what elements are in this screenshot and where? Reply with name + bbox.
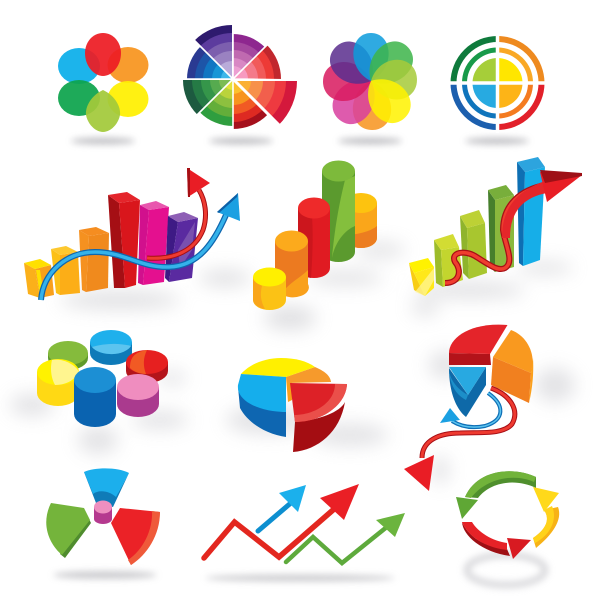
icon: eight petal flower bbox=[322, 33, 421, 132]
slice: red bbox=[449, 325, 508, 365]
cylinder: amber back bbox=[345, 193, 377, 248]
cylinder: orange bbox=[275, 230, 309, 297]
blade: blue bbox=[84, 468, 129, 507]
arrow: red bbox=[462, 522, 531, 559]
chart: 3D pie bbox=[238, 358, 347, 452]
row three ground shadows bbox=[10, 351, 575, 484]
shadow ring bbox=[467, 555, 545, 585]
arrow: red bbox=[147, 168, 210, 258]
chart: cylinders bbox=[253, 160, 377, 310]
slice: blue wedge bbox=[449, 367, 486, 417]
disc: light blue bbox=[90, 330, 132, 365]
icon: disc cluster bbox=[37, 330, 168, 427]
disc: green bbox=[48, 341, 88, 370]
bar: blue bbox=[517, 157, 545, 266]
bar three bbox=[79, 227, 109, 292]
slice: orange bbox=[491, 330, 533, 403]
cylinder: yellow bbox=[253, 268, 286, 310]
bar: yellow bbox=[409, 258, 434, 296]
icon: six petal flower bbox=[58, 33, 148, 132]
bar four bbox=[108, 192, 140, 288]
blade: red bbox=[111, 508, 160, 565]
icon: cycle arrows bbox=[456, 471, 559, 585]
cylinder: blue bbox=[74, 367, 116, 427]
row one ground shadows bbox=[71, 138, 529, 144]
wedge: dark green bbox=[183, 80, 231, 114]
bar: green bbox=[488, 185, 514, 272]
arrow: blue swoop bbox=[440, 393, 500, 427]
bottom ground shadows bbox=[53, 571, 395, 582]
bar six bbox=[165, 212, 198, 282]
arrow: green bbox=[286, 513, 405, 563]
hub cylinder bbox=[94, 500, 112, 524]
chart: bars with two arrows bbox=[24, 168, 240, 300]
cylinder: yellow bbox=[37, 359, 79, 406]
icon: three blade fan bbox=[46, 468, 160, 565]
bar five bbox=[138, 201, 169, 285]
arrow: yellow bbox=[533, 487, 559, 548]
chart: exploded pie with arrows bbox=[404, 325, 533, 491]
arrow: red bbox=[204, 484, 359, 558]
arrow: green bbox=[456, 471, 536, 519]
arrow: blue bbox=[41, 193, 240, 300]
icon: color wheel bbox=[183, 25, 297, 129]
cylinder: green bbox=[322, 160, 355, 262]
bar one bbox=[24, 259, 54, 298]
bar: lime bbox=[460, 210, 487, 279]
slice: orange bbox=[286, 367, 331, 402]
slice: red bbox=[290, 383, 347, 452]
wedge: red pink bbox=[235, 46, 281, 79]
slice: yellow bbox=[241, 358, 315, 377]
blade: green bbox=[46, 503, 91, 558]
cylinder: red bbox=[298, 198, 330, 278]
wedge: yellow green bbox=[200, 81, 232, 126]
icon: target quadrants bbox=[448, 33, 548, 133]
chart: rising bars with ribbon arrow bbox=[409, 157, 582, 296]
arrow: blue bbox=[258, 485, 306, 531]
arrow: red swoop bbox=[404, 388, 515, 491]
bar two bbox=[51, 246, 80, 295]
cylinder: pink bbox=[117, 374, 159, 417]
disc: red bbox=[126, 350, 168, 383]
wedge: orange dark red bbox=[234, 82, 267, 129]
row two ground shadows bbox=[60, 243, 573, 330]
wedge: deep purple bbox=[195, 25, 232, 77]
slice: blue bbox=[238, 374, 286, 437]
chart: zigzag arrows bbox=[204, 484, 405, 563]
wedge: blue bbox=[187, 47, 231, 78]
wedge: magenta purple bbox=[234, 34, 264, 77]
bar: light lime bbox=[434, 234, 463, 287]
wedge: long crimson bbox=[237, 81, 297, 124]
arrow: red ribbon bbox=[445, 170, 582, 283]
